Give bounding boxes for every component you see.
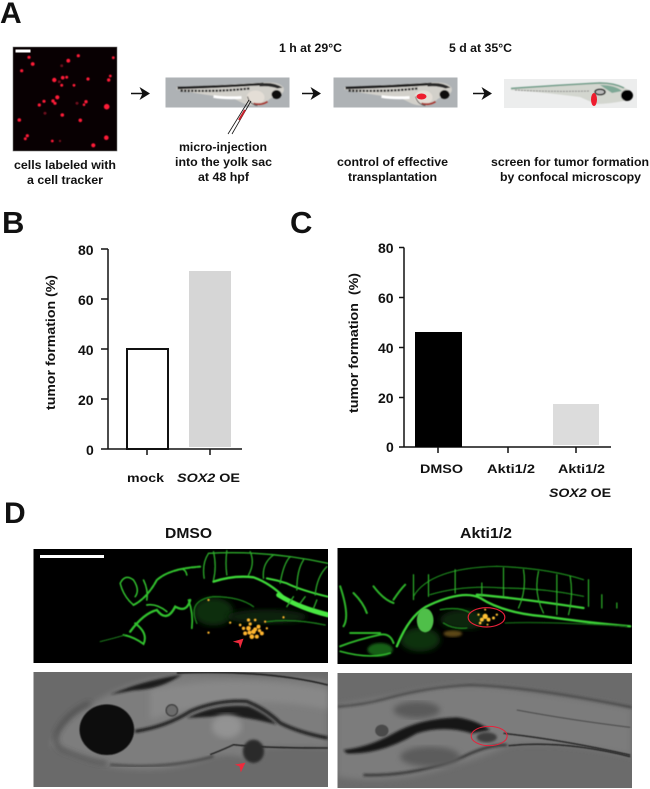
label: Akti1/2 SOX2 OE: SOX2 OE [549, 486, 611, 500]
caption: micro-injection: at 48 hpf [198, 170, 250, 184]
label: 1 h at 29C: 1 h at 29°C [279, 41, 342, 55]
micrograph: labeled cells [13, 47, 117, 151]
larva with tumor [504, 79, 637, 108]
caption: screen [491, 155, 649, 184]
micrograph: DMSO brightfield [34, 672, 328, 787]
label: mock: mock [127, 471, 164, 485]
bar: mock [127, 349, 168, 449]
label: 5 d at 35C: 5 d at 35°C [449, 41, 512, 55]
scale bar [40, 555, 104, 558]
arrow 3 [473, 87, 492, 100]
larva with red cell mass [334, 78, 458, 108]
larva with injection needle [166, 78, 290, 134]
caption: control: transplantation [348, 170, 437, 184]
caption: screen: screen for tumor formation [491, 155, 649, 169]
caption: screen: by confocal microscopy [500, 170, 641, 184]
tick labels C: 40 [378, 340, 394, 356]
tick labels C: 20 [378, 390, 394, 406]
panel C: bar chart [290, 205, 611, 500]
heading DMSO: DMSO [165, 525, 212, 542]
tick labels B: 60 [78, 292, 94, 308]
label: SOX2 OE: SOX2 OE [177, 471, 240, 485]
tick labels C: 80 [378, 240, 394, 256]
caption: cells labeled: cells labeled with [14, 158, 116, 172]
panel letter C: C [290, 205, 312, 240]
tick labels B: 0 [86, 442, 94, 458]
label: Akti1/2 SOX2 OE [549, 462, 611, 500]
bar: Akti1/2 SOX2 OE [553, 404, 599, 445]
micrograph: Akti1/2 brightfield [338, 673, 632, 788]
micrograph: DMSO fluorescence [34, 549, 328, 663]
y label B: tumor formation (%) [43, 275, 58, 410]
caption: control: control of effective [337, 155, 448, 169]
y axis B [101, 249, 242, 455]
micrograph: Akti1/2 fluorescence [338, 548, 632, 664]
tick labels B: 40 [78, 342, 94, 358]
y axis C [399, 248, 611, 453]
caption: control [337, 155, 448, 184]
y label C: tumor formation (%) [346, 273, 361, 413]
bar: DMSO [415, 332, 462, 447]
tick labels B [78, 242, 94, 458]
panel letter B: B [2, 205, 24, 240]
label: Akti1/2 SOX2 OE: Akti1/2 [558, 462, 605, 476]
caption: micro-injection [175, 140, 272, 184]
tick labels B: 20 [78, 392, 94, 408]
label: Akti1/2: Akti1/2 [487, 462, 535, 476]
caption: cells labeled: a cell tracker [27, 173, 103, 187]
panel D: microscopy [4, 497, 632, 788]
arrow 2 [302, 87, 321, 100]
caption: micro-injection: micro-injection [179, 140, 267, 154]
caption: micro-injection: into the yolk sac [175, 155, 272, 169]
panel A: transplantation workflow [0, 0, 649, 187]
label: DMSO: DMSO [420, 462, 463, 476]
caption: cells labeled [14, 158, 116, 187]
panel letter D: D [4, 497, 26, 530]
tick labels C [378, 240, 394, 455]
panel B: bar chart [2, 205, 242, 485]
tick labels B: 80 [78, 242, 94, 258]
tick labels C: 0 [386, 439, 394, 455]
tick labels C: 60 [378, 290, 394, 306]
arrow 1 [131, 87, 150, 100]
bar: SOX2 OE [189, 271, 231, 447]
heading Akti1/2: Akti1/2 [460, 525, 512, 542]
